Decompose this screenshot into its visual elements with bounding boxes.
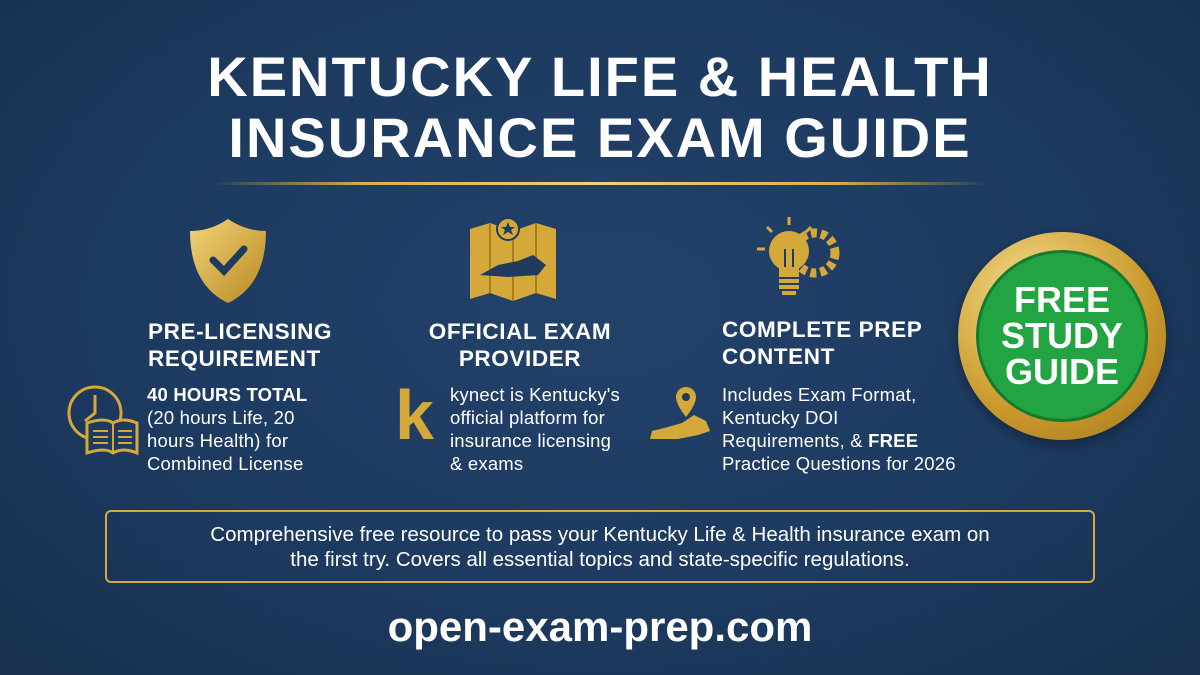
callout box bbox=[105, 510, 1095, 583]
panel: official exam provider bbox=[395, 219, 620, 474]
icon: kentucky pin bbox=[650, 387, 710, 439]
icon: kynect k logo: k bbox=[395, 376, 434, 454]
icon: shield bbox=[190, 219, 266, 303]
website url: open-exam-prep.com bbox=[388, 603, 812, 650]
body text: Requirements, & FREE bbox=[722, 430, 918, 451]
panel: pre-licensing bbox=[68, 219, 332, 474]
title: INSURANCE EXAM GUIDE bbox=[228, 106, 972, 169]
heading: PROVIDER bbox=[459, 346, 581, 371]
body text: Kentucky DOI bbox=[722, 407, 839, 428]
body text: insurance licensing bbox=[450, 430, 611, 451]
icon: clock and book bbox=[68, 386, 138, 455]
body text bbox=[450, 384, 620, 474]
callout box: Comprehensive free resource to pass your Kentucky Life & Health insurance exam on bbox=[210, 523, 990, 546]
icon: bulb and gear bbox=[757, 217, 840, 295]
body text bbox=[722, 384, 956, 474]
heading bbox=[148, 319, 332, 371]
heading: PRE-LICENSING bbox=[148, 319, 332, 344]
heading: REQUIREMENT bbox=[148, 346, 321, 371]
heading bbox=[429, 319, 611, 371]
badge: free study guide: GUIDE bbox=[1005, 351, 1119, 392]
body text: 40 HOURS TOTAL bbox=[147, 384, 307, 405]
heading bbox=[722, 317, 922, 369]
body text: & exams bbox=[450, 453, 523, 474]
heading: CONTENT bbox=[722, 344, 835, 369]
panel: complete prep content bbox=[650, 217, 956, 474]
body text: Includes Exam Format, bbox=[722, 384, 916, 405]
body text: official platform for bbox=[450, 407, 605, 428]
title: KENTUCKY LIFE & HEALTH bbox=[207, 45, 993, 108]
body text bbox=[147, 384, 307, 474]
callout box: the first try. Covers all essential topics and state-specific regulations. bbox=[290, 548, 910, 571]
body text: hours Health) for bbox=[147, 430, 288, 451]
body text: kynect is Kentucky's bbox=[450, 384, 620, 405]
badge: free study guide: FREE bbox=[1014, 279, 1110, 320]
divider bbox=[210, 182, 990, 185]
body text: Practice Questions for 2026 bbox=[722, 453, 956, 474]
icon: map bbox=[470, 219, 556, 301]
title bbox=[207, 45, 993, 169]
heading: OFFICIAL EXAM bbox=[429, 319, 611, 344]
badge: free study guide: STUDY bbox=[1001, 315, 1123, 356]
badge: free study guide bbox=[958, 232, 1166, 440]
body text: (20 hours Life, 20 bbox=[147, 407, 295, 428]
heading: COMPLETE PREP bbox=[722, 317, 922, 342]
body text: Combined License bbox=[147, 453, 303, 474]
